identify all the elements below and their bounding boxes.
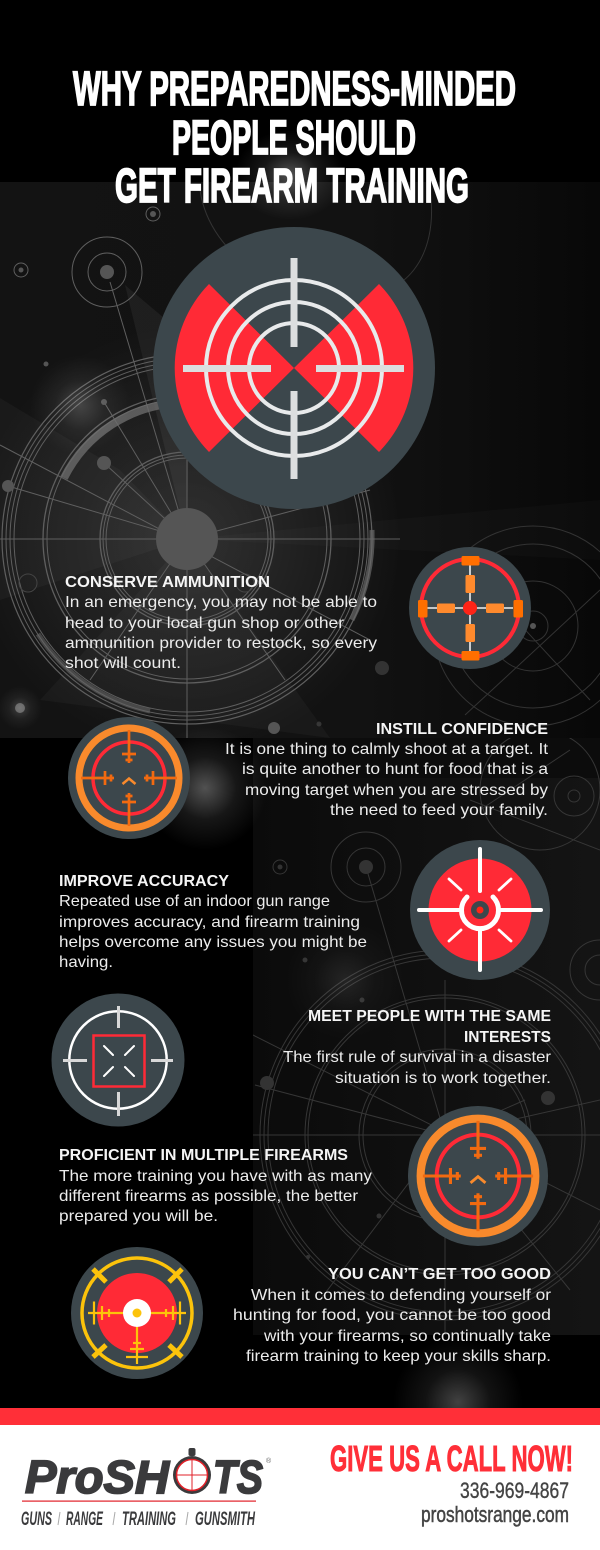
text: you can't get too good: YOU CAN’T GET TOO GOOD: [328, 1266, 551, 1283]
text: proficient: PROFICIENT IN MULTIPLE FIREARMS: [59, 1147, 348, 1164]
text: improve accuracy: [59, 873, 367, 971]
text: instill confidence: the need to feed your family.: [330, 802, 548, 819]
text: proficient: The more training you have with as many: [59, 1168, 372, 1185]
icon: red bullseye sight: [410, 840, 550, 980]
icon: orange markers crosshair: [409, 547, 531, 669]
logo: [21, 1448, 272, 1530]
text: conserve ammunition: CONSERVE AMMUNITION: [65, 574, 270, 591]
text: you can't get too good: [233, 1266, 552, 1365]
text: you can't get too good: firearm training to keep your skills sharp.: [246, 1348, 551, 1365]
text: you can't get too good: hunting for food, you cannot be too good: [233, 1307, 551, 1324]
text: instill confidence: is quite another to hunt for food that is a: [242, 761, 548, 778]
text: proficient: different firearms as possible, the better: [59, 1188, 359, 1205]
text: proficient: prepared you will be.: [59, 1208, 218, 1225]
text: meet people: situation is to work together.: [335, 1070, 551, 1087]
title: [73, 63, 516, 213]
icon: large orange scope: [408, 1106, 548, 1246]
title: PEOPLE SHOULD: [172, 112, 416, 165]
text: meet people: MEET PEOPLE WITH THE SAME: [308, 1008, 551, 1025]
text: conserve ammunition: head to your local gun shop or other: [65, 615, 345, 632]
call to action: 336-969-4867: [460, 1478, 569, 1503]
text: meet people: The first rule of survival in a disaster: [283, 1049, 552, 1066]
logo: RANGE: [66, 1509, 104, 1530]
text: proficient: [59, 1147, 372, 1225]
footer band: [0, 1408, 600, 1425]
text: conserve ammunition: ammunition provider to restock, so every: [65, 635, 377, 652]
footer panel: [0, 1425, 600, 1550]
logo: ®: [266, 1457, 272, 1465]
logo: GUNSMITH: [195, 1509, 256, 1530]
text: meet people: [283, 1008, 552, 1087]
icon: main target: [153, 227, 435, 509]
icon: yellow scope: [71, 1247, 203, 1379]
text: conserve ammunition: [65, 574, 377, 672]
text: meet people: INTERESTS: [464, 1029, 551, 1046]
call to action: [330, 1438, 573, 1527]
text: improve accuracy: having.: [59, 954, 113, 971]
text: instill confidence: It is one thing to calmly shoot at a target. It: [225, 741, 549, 758]
text: improve accuracy: IMPROVE ACCURACY: [59, 873, 229, 890]
logo: GUNS: [21, 1509, 52, 1530]
icon: square reticle: [52, 994, 184, 1126]
text: instill confidence: INSTILL CONFIDENCE: [376, 721, 548, 738]
text: improve accuracy: Repeated use of an indoor gun range: [59, 893, 330, 910]
text: instill confidence: moving target when you are stressed by: [245, 782, 548, 799]
text: conserve ammunition: In an emergency, you may not be able to: [65, 594, 377, 611]
text: instill confidence: [225, 721, 549, 819]
text: you can't get too good: When it comes to defending yourself or: [251, 1287, 552, 1304]
logo: ProSH: [25, 1451, 170, 1503]
text: improve accuracy: improves accuracy, and firearm training: [59, 914, 360, 931]
text: improve accuracy: helps overcome any issues you might be: [59, 934, 367, 951]
icon: orange scope: [68, 717, 190, 839]
text: conserve ammunition: shot will count.: [65, 655, 181, 672]
logo: TRAINING: [122, 1509, 176, 1530]
text: you can't get too good: with your firearms, so continually take: [263, 1328, 551, 1345]
logo: TS: [213, 1451, 263, 1503]
